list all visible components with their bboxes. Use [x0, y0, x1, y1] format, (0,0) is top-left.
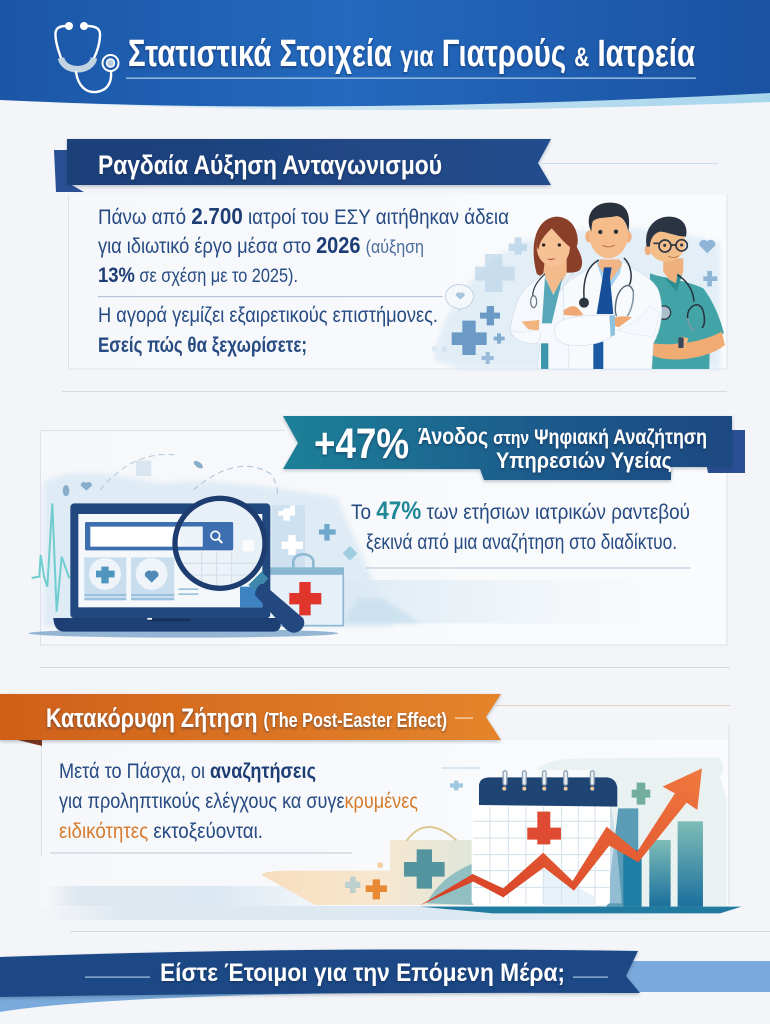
search text: [351, 497, 690, 554]
statistics text: Πάνω από 2.700 ιατροί του ΕΣΥ αιτήθηκαν άδεια: [98, 203, 509, 229]
panel: competition growth: [54, 139, 727, 369]
figure: doctor in scrubs: [645, 217, 725, 369]
market text: Η αγορά γεμίζει εξαιρετικούς επιστήμονες.: [98, 304, 438, 327]
section ribbon: +47%: [314, 420, 409, 468]
panel: digital search: [28, 416, 745, 645]
icon: stethoscope: [55, 22, 118, 92]
market text: Εσείς πώς θα ξεχωρίσετε;: [98, 334, 307, 357]
section ribbon: Υπηρεσιών Υγείας: [496, 448, 672, 473]
demand text: ειδικότητες εκτοξεύονται.: [59, 820, 263, 843]
search text: Το 47% των ετήσιων ιατρικών ραντεβού: [351, 497, 690, 525]
divider: [40, 667, 730, 668]
icon: medical case: [263, 554, 344, 626]
illustration: three doctors: [432, 203, 725, 369]
demand text: [59, 760, 418, 843]
title: Στατιστικά Στοιχεία για Γιατρούς & Ιατρεία: [128, 33, 695, 75]
section ribbon: [283, 416, 745, 480]
figure: central doctor: [555, 203, 662, 369]
section ribbon: Άνοδος στην Ψηφιακή Αναζήτηση: [418, 423, 707, 449]
illustration: calendar with rising arrow: [262, 757, 742, 913]
arrow: rising trend: [420, 768, 702, 905]
figure: female doctor: [510, 217, 582, 369]
demand text: Μετά το Πάσχα, οι αναζητήσεις: [59, 760, 316, 783]
divider: [70, 931, 770, 932]
closing banner: [0, 949, 770, 1012]
icon: magnifying glass: [175, 498, 304, 633]
icon: laptop: [53, 503, 281, 632]
section ribbon: [54, 139, 718, 192]
illustration: laptop and magnifier: [28, 454, 673, 638]
search text: ξεκινά από μια αναζήτηση στο διαδίκτυο.: [366, 531, 677, 554]
panel background: [40, 430, 727, 645]
section ribbon: [0, 694, 730, 746]
statistics text: [98, 203, 509, 287]
icon: calendar: [472, 773, 622, 905]
market text: [98, 304, 438, 357]
panel background: [41, 740, 729, 908]
section ribbon: Κατακόρυφη Ζήτηση (The Post-Easter Effect): [46, 703, 447, 733]
divider: [62, 391, 727, 392]
closing banner: Είστε Έτοιμοι για την Επόμενη Μέρα;: [160, 959, 565, 987]
demand text: για προληπτικούς ελέγχους κα συγεκρυμένες: [59, 790, 418, 813]
statistics text: 13% σε σχέση με το 2025).: [98, 263, 298, 287]
header band: [0, 0, 770, 110]
section ribbon: Ραγδαία Αύξηση Ανταγωνισμού: [98, 150, 442, 180]
panel background: [68, 195, 727, 369]
statistics text: για ιδιωτικό έργο μέσα στο 2026 (αύξηση: [98, 232, 424, 258]
panel: post-Easter demand: [0, 694, 742, 920]
